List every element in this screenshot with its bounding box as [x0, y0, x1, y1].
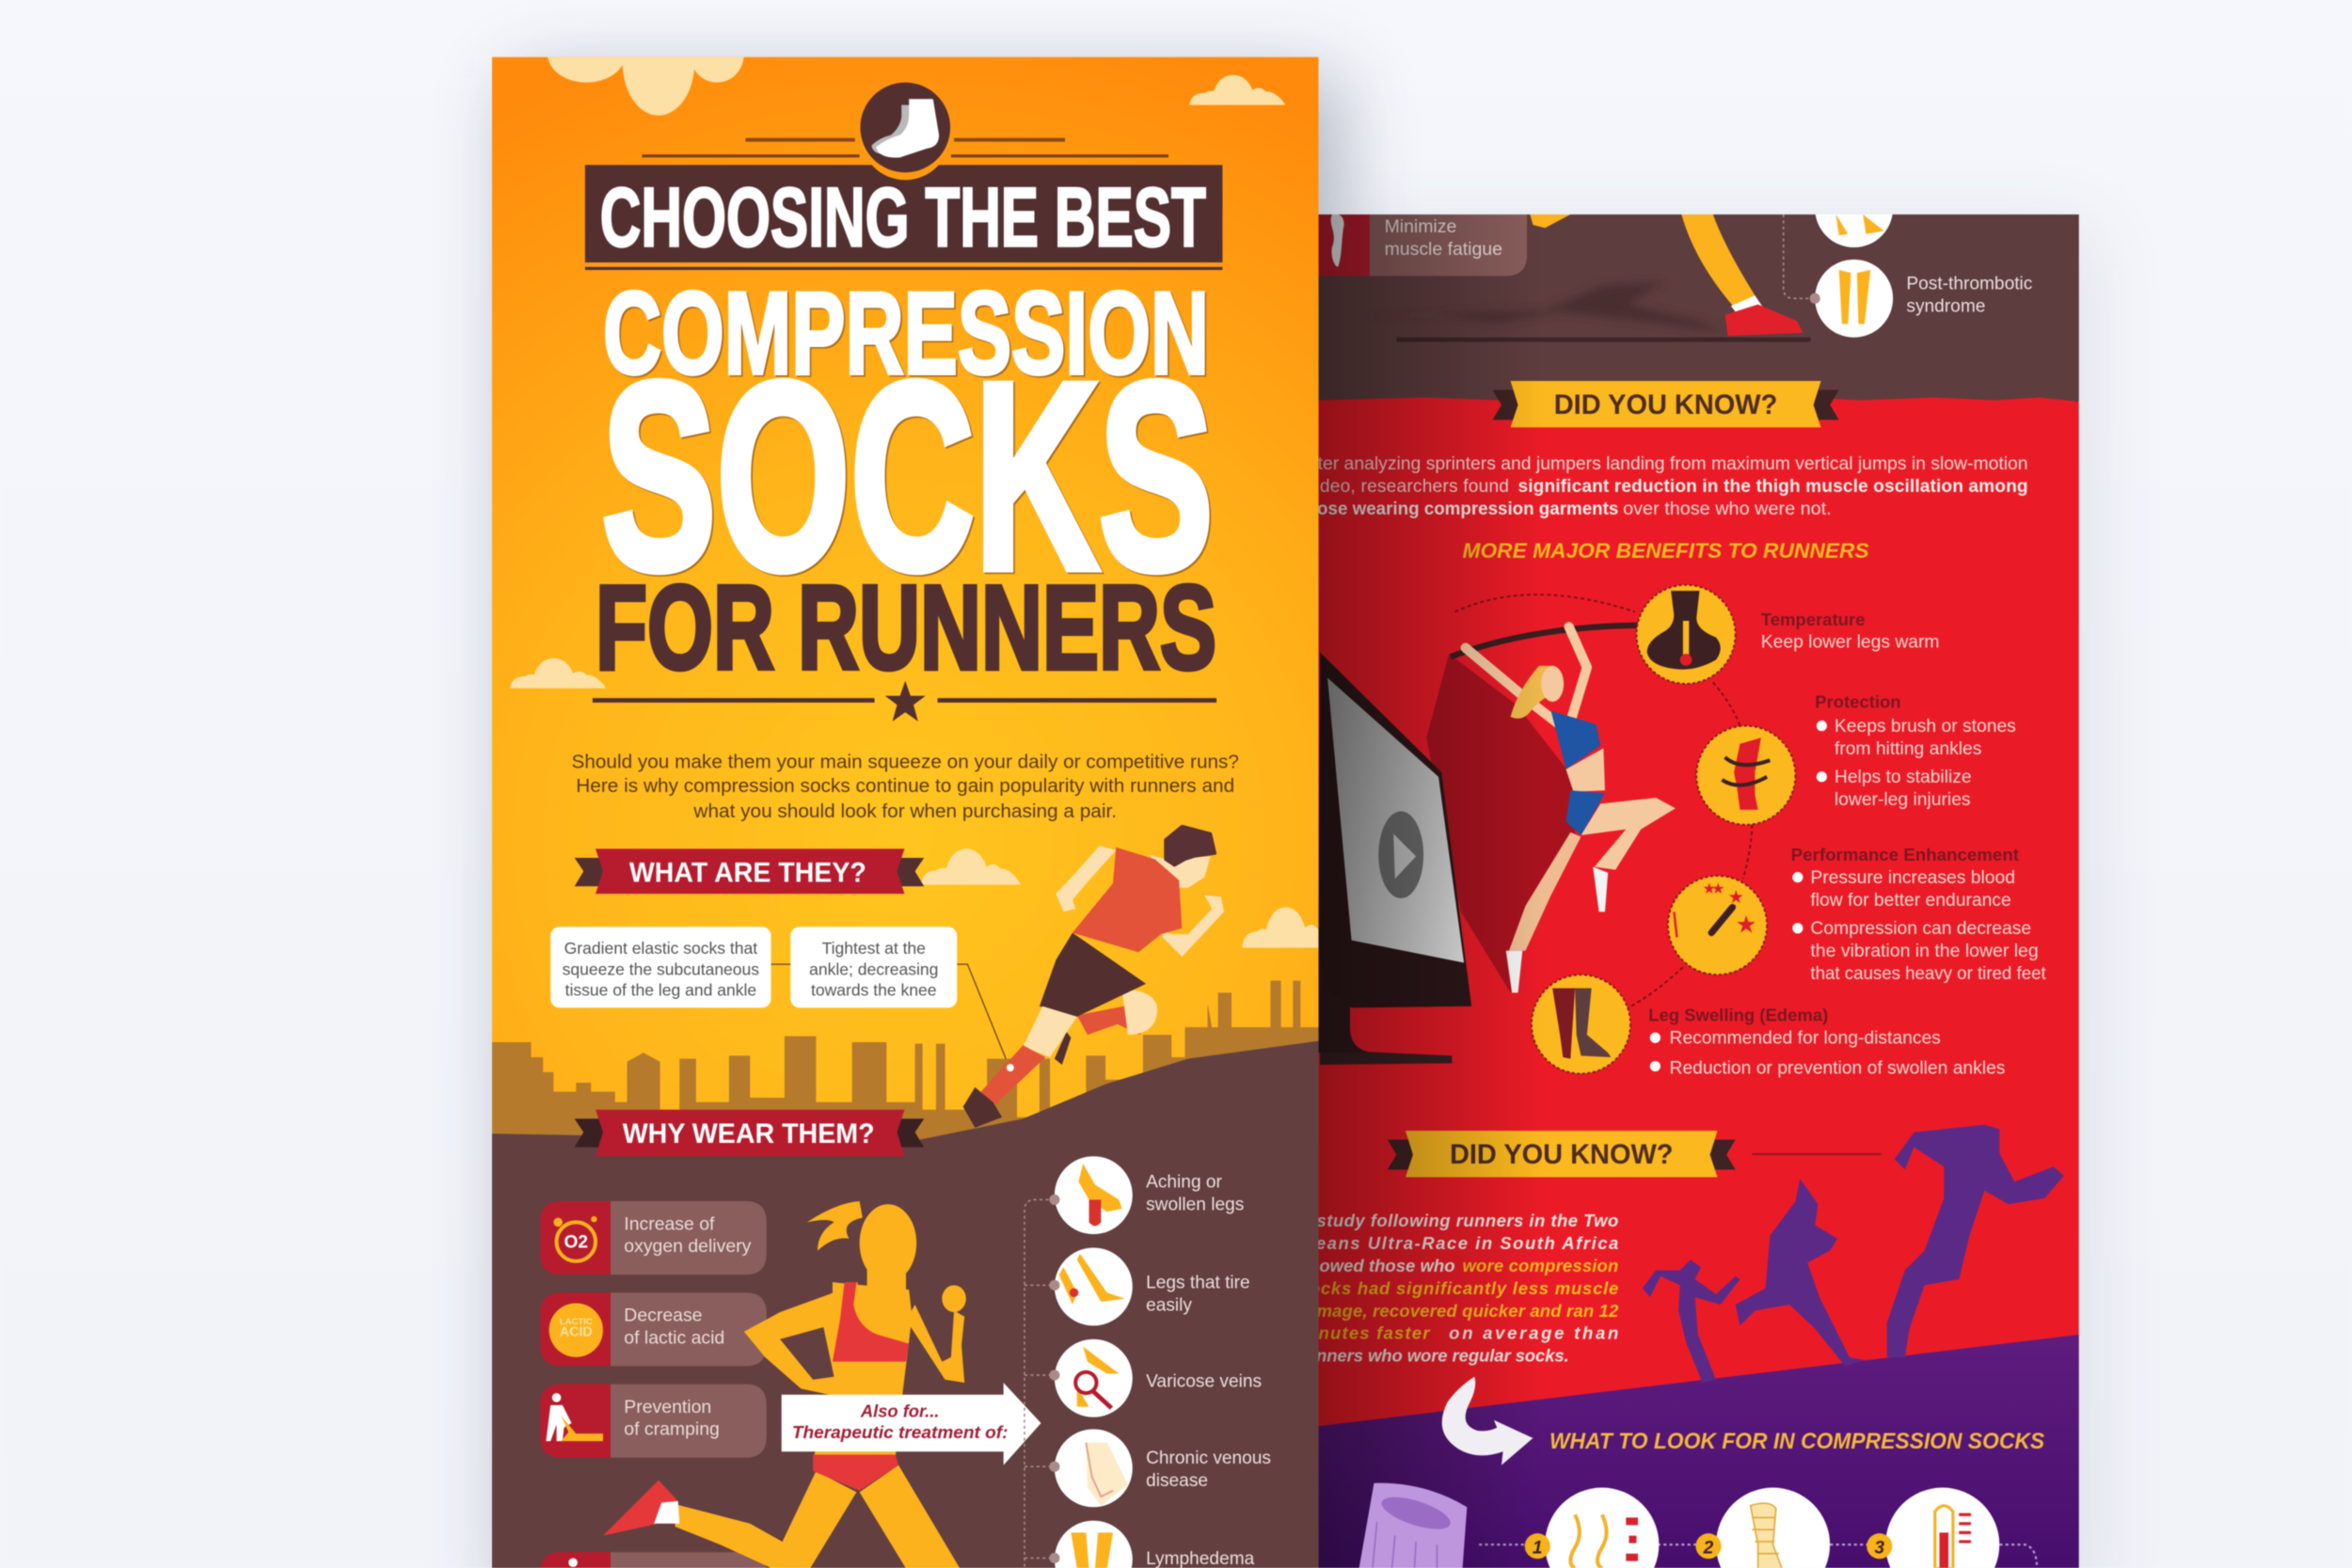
cloud: right [1242, 908, 1338, 948]
text block: intro [571, 751, 1239, 822]
section: purple diagonal band [1318, 1335, 2079, 1568]
callout: definition: Gradient elastic socks that [564, 939, 757, 958]
icon: speedometer: ★ [1711, 881, 1724, 897]
condition: aching or swollen legs [1049, 1156, 1244, 1234]
pill: lactic acid [540, 1292, 767, 1366]
text block: two oceans study: Oceans Ultra-Race in South Africa [1290, 1233, 1618, 1253]
text block: sprinters study [1300, 454, 2028, 519]
title: compression: COMPRESSION [603, 268, 1209, 399]
ribbon: did you know 1: DID YOU KNOW? [1554, 389, 1777, 420]
illustration: male runner [963, 826, 1224, 1128]
illustration: video monitor [1318, 653, 1471, 1065]
callout: definition: tissue of the leg and ankle [565, 981, 756, 1000]
pill: minimize muscle fatigue [1318, 214, 1527, 276]
step 3: 3 [1874, 1539, 1884, 1559]
text block: sprinters study: video, researchers found [1307, 477, 1509, 497]
ribbon: did you know 2 [1388, 1131, 1881, 1178]
condition: chronic venous disease: disease [1146, 1471, 1208, 1491]
benefit: protection: lower-leg injuries [1835, 790, 1971, 810]
hill [492, 1040, 1320, 1568]
pill: lactic acid: ACID [560, 1325, 593, 1340]
arrow: also for therapeutic treatment: Therapeutic treatment of: [792, 1422, 1008, 1442]
arrow: also for therapeutic treatment: Also for... [860, 1402, 939, 1421]
heading: what to look for: WHAT TO LOOK FOR IN COMPRESSION SOCKS [1549, 1429, 2044, 1454]
condition: aching or swollen legs: swollen legs [1146, 1196, 1244, 1215]
panel: right page (did you know, benefits, what to look for) [1290, 169, 2079, 1568]
cloud: beside ribbon [921, 848, 1021, 885]
benefit: protection [1815, 692, 2016, 810]
step 2: 2 [1703, 1539, 1714, 1559]
arrow: also for therapeutic treatment [782, 1383, 1041, 1465]
text block: two oceans study: wore compression [1463, 1256, 1618, 1275]
step 1: 1 [1533, 1539, 1543, 1559]
text block: sprinters study: After analyzing sprinters and jumpers landing from maximum vertical jumps in slow-motion [1300, 454, 2028, 474]
cloud: left [510, 658, 606, 689]
decorative logo: sock badge [642, 83, 1168, 180]
condition: legs that tire easily [1049, 1247, 1250, 1325]
text block: two oceans study [1290, 1211, 1619, 1366]
benefit: performance enhancement: Performance Enhancement [1791, 845, 2019, 864]
benefit: leg swelling: Recommended for long-distances [1670, 1029, 1941, 1049]
benefit: leg swelling: Reduction or prevention of swollen ankles [1670, 1059, 2005, 1079]
text block: two oceans study: runners who wore regular socks. [1299, 1346, 1569, 1366]
benefit: protection: from hitting ankles [1835, 739, 1981, 759]
dashed connector [1455, 594, 1752, 1007]
ribbon: why wear them [575, 1110, 924, 1156]
benefit: temperature: Temperature [1761, 610, 1865, 629]
cloud: top right [1189, 75, 1285, 105]
condition: lymphedema [1049, 1521, 1255, 1568]
text block: intro: what you should look for when purchasing a pair. [692, 800, 1117, 822]
text block: two oceans study: socks had significantly less muscle [1299, 1278, 1618, 1298]
panel: left page [492, 10, 1338, 1568]
divider with star [593, 681, 1216, 721]
pill: oxygen delivery: oxygen delivery [624, 1236, 752, 1257]
callout: definition: squeeze the subcutaneous [563, 959, 759, 978]
step 3 [1867, 1488, 1999, 1568]
benefit: protection: Keeps brush or stones [1835, 717, 2016, 736]
text block: two oceans study: on average than [1449, 1323, 1618, 1343]
title: choosing the best [585, 165, 1222, 270]
ribbon: what are they: WHAT ARE THEY? [629, 857, 866, 888]
pill: oxygen delivery [540, 1201, 767, 1275]
illustration: pole vault jumper [1451, 626, 1676, 992]
text block: two oceans study: A study following runners in the Two [1298, 1211, 1618, 1230]
benefit: leg swelling: Leg Swelling (Edema) [1648, 1006, 1828, 1025]
title: for runners: FOR RUNNERS [596, 562, 1216, 695]
ribbon: did you know 1 [1492, 381, 1839, 427]
benefit: protection: Helps to stabilize [1835, 768, 1972, 787]
text block: sprinters study: significant reduction in the thigh muscle oscillation among [1518, 477, 2028, 497]
text block: sprinters study: those wearing compression garments [1300, 499, 1618, 519]
pill: oxygen delivery: O2 [564, 1232, 588, 1252]
ribbon: did you know 2: DID YOU KNOW? [1450, 1139, 1674, 1170]
icon: speedometer: ★ [1703, 881, 1716, 897]
pill: cramping [540, 1385, 767, 1458]
dotted bracket [1025, 1199, 1055, 1568]
runner shadow and ground [1358, 282, 1810, 342]
pill: cramping: Prevention [624, 1397, 711, 1418]
heading: more major benefits: MORE MAJOR BENEFITS TO RUNNERS [1463, 539, 1869, 562]
pill: lactic acid: Decrease [624, 1306, 703, 1326]
title: socks: SOCKS [601, 327, 1214, 626]
pill: oxygen delivery: Increase of [624, 1213, 715, 1234]
benefit: performance enhancement: the vibration in the lower leg [1810, 942, 2039, 961]
icon: speedometer: ★ [1736, 912, 1757, 939]
callout: tightest at the ankle: ankle; decreasing [809, 959, 938, 978]
benefit: performance enhancement: Compression can decrease [1810, 919, 2031, 939]
benefit: temperature: Keep lower legs warm [1761, 633, 1939, 653]
woman runner lower leg [1530, 214, 1803, 336]
condition: legs that tire easily: easily [1146, 1295, 1192, 1315]
dotted step connector [1479, 1544, 2037, 1568]
condition: aching or swollen legs: Aching or [1146, 1173, 1223, 1193]
illustration: purple sock [1359, 1483, 1467, 1568]
title: choosing the best: CHOOSING THE BEST [600, 169, 1206, 263]
treatment list continued: post-thrombotic syndrome [1782, 214, 2032, 339]
icon: speedometer: ★ [1728, 888, 1744, 908]
cloud: top [548, 10, 744, 116]
callout: tightest at the ankle: towards the knee [811, 981, 936, 1000]
benefit: performance enhancement: that causes heavy or tired feet [1810, 964, 2046, 984]
treatment list continued: post-thrombotic syndrome: syndrome [1906, 297, 1985, 317]
pill: minimize muscle fatigue: muscle fatigue [1385, 239, 1502, 260]
icon: speedometer [1668, 876, 1767, 974]
condition: chronic venous disease: Chronic venous [1146, 1449, 1271, 1468]
callout: tightest at the ankle [771, 927, 1009, 1068]
ribbon: what are they [575, 848, 924, 894]
step 1 [1525, 1488, 1659, 1568]
pill: lactic acid: of lactic acid [624, 1327, 724, 1348]
text block: two oceans study: showed those who [1299, 1256, 1455, 1275]
illustration: female runner [603, 1201, 966, 1568]
section: brown top band [1318, 214, 2079, 402]
icon: temperature [1636, 585, 1736, 684]
infographic canvas [456, 35, 2119, 1568]
text block: two oceans study: damage, recovered quicker and ran 12 [1296, 1301, 1619, 1321]
step 2 [1695, 1488, 1830, 1568]
pill: minimize muscle fatigue: Minimize [1385, 216, 1456, 237]
pill: lactic acid: LACTIC [560, 1317, 593, 1327]
text block: sprinters study: over those who were not. [1623, 499, 1832, 519]
benefit: performance enhancement: flow for better endurance [1810, 891, 2011, 911]
icon: leg swelling [1532, 974, 1630, 1074]
text block: intro: Here is why compression socks continue to gain popularity with runners and [576, 775, 1234, 797]
condition: legs that tire easily: Legs that tire [1146, 1274, 1250, 1293]
benefit: temperature [1761, 610, 1939, 653]
treatment list continued: post-thrombotic syndrome: Post-thrombotic [1906, 275, 2033, 294]
callout: tightest at the ankle: Tightest at the [822, 939, 926, 958]
pill: cramping: of cramping [624, 1419, 720, 1440]
icon: protection [1696, 726, 1795, 825]
callout: definition [550, 927, 771, 1007]
ribbon: why wear them: WHY WEAR THEM? [623, 1118, 875, 1149]
pill: muscle fatigue (top) [540, 1552, 767, 1568]
text block: two oceans study: minutes faster [1296, 1323, 1431, 1343]
benefit: leg swelling [1648, 1006, 2005, 1079]
condition: varicose veins: Varicose veins [1146, 1372, 1262, 1392]
benefit: performance enhancement [1791, 845, 2046, 984]
condition: varicose veins [1049, 1339, 1262, 1418]
skyline [492, 981, 1320, 1140]
silhouettes: three runners [1643, 1125, 2064, 1383]
benefit: protection: Protection [1815, 692, 1901, 712]
arrow: curved white [1442, 1377, 1533, 1465]
benefit: performance enhancement: Pressure increases blood [1810, 868, 2015, 888]
condition: chronic venous disease [1049, 1429, 1271, 1507]
text block: intro: Should you make them your main squeeze on your daily or competitive runs? [571, 751, 1239, 772]
illustration: shadow shape behind jumper [1426, 654, 1575, 992]
